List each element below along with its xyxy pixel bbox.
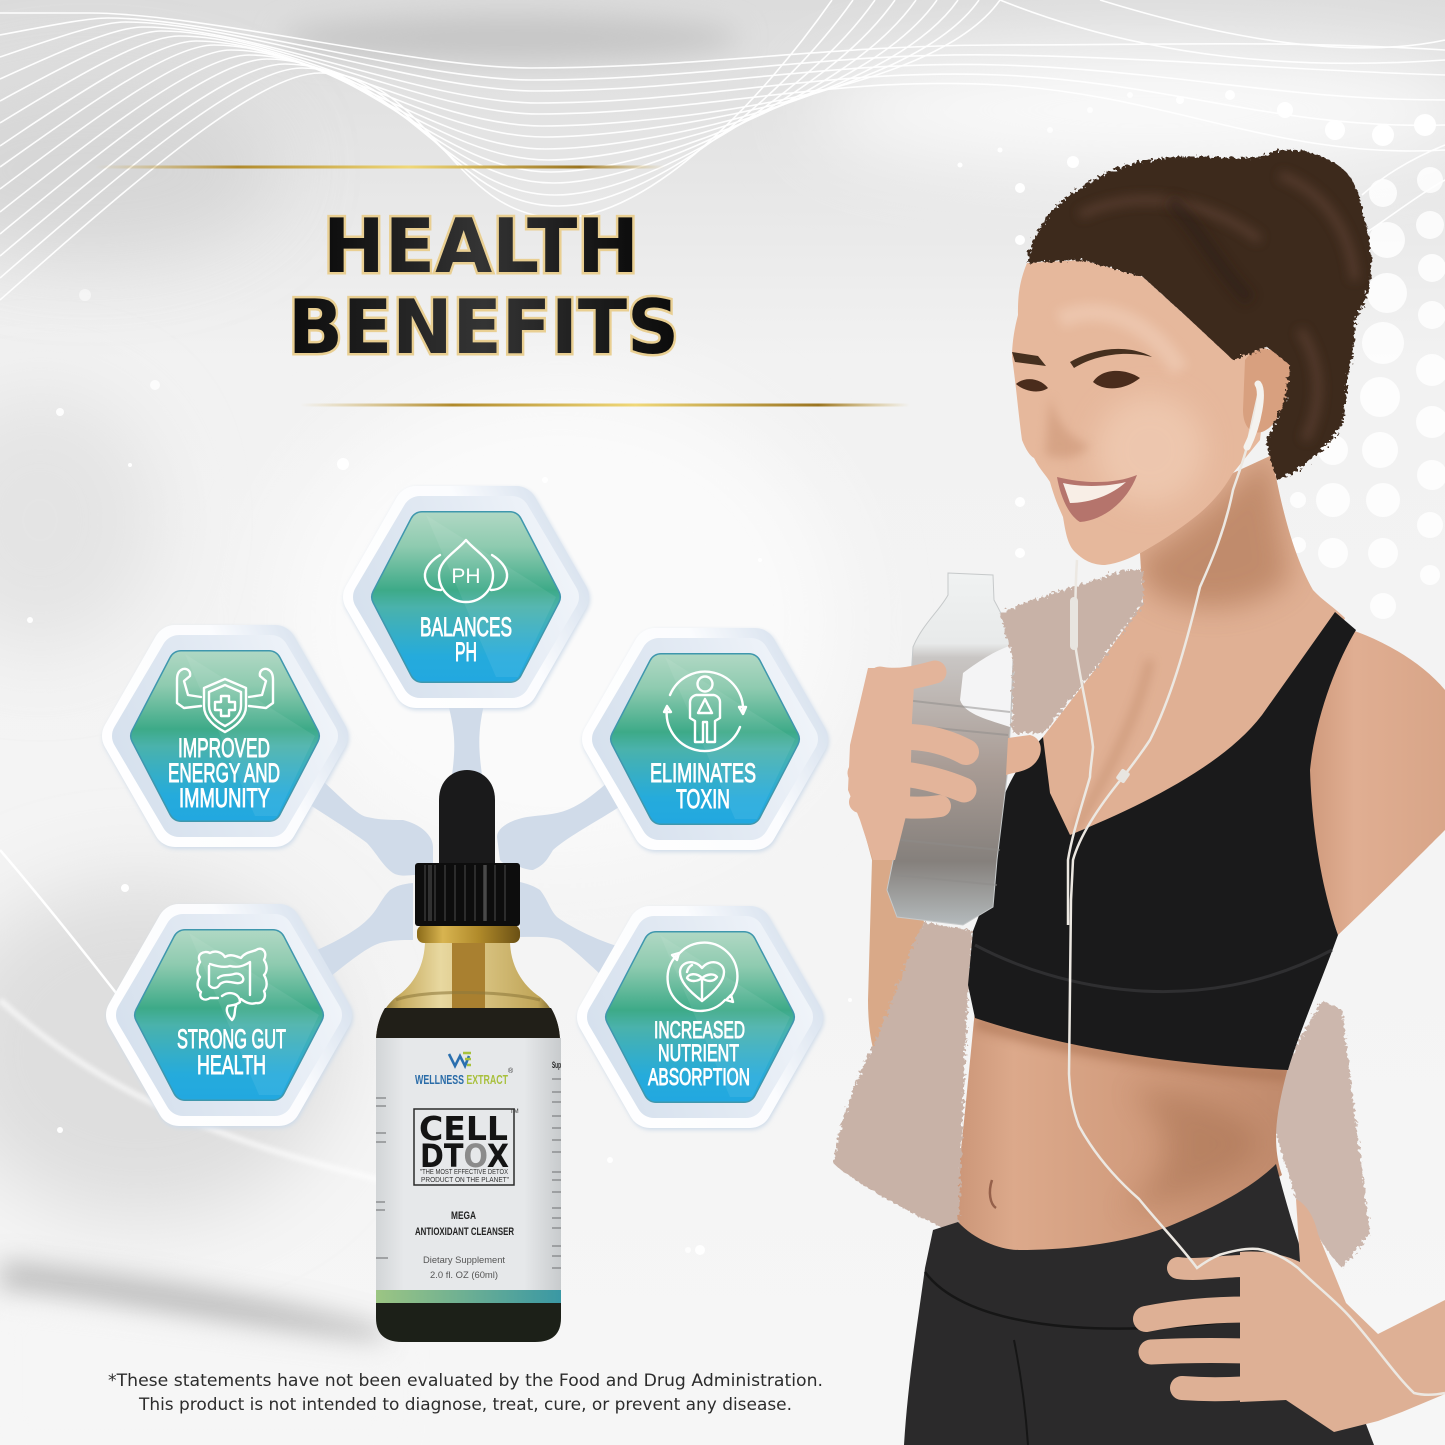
- product logo: "THE MOST EFFECTIVE DETOX: [420, 1169, 508, 1176]
- size text: [423, 1255, 505, 1281]
- dropper bulb: [439, 770, 495, 864]
- ear: [1243, 349, 1290, 433]
- leggings: [904, 1164, 1374, 1445]
- label: ELIMINATES: [650, 758, 756, 788]
- disclaimer: This product is not intended to diagnose, treat, cure, or prevent any disease.: [138, 1395, 792, 1414]
- hexagon: eliminates toxin: [604, 650, 807, 830]
- wave lines: [0, 0, 1445, 300]
- label: [648, 1017, 750, 1091]
- towel left: [834, 922, 973, 1234]
- logo mark: [449, 1053, 471, 1066]
- side panel text: Sup: [552, 1060, 561, 1070]
- gold ring: [417, 925, 520, 943]
- icon: intestines: [197, 949, 267, 1020]
- label: [168, 733, 280, 813]
- label: STRONG GUT: [177, 1024, 286, 1054]
- label: ENERGY AND: [168, 758, 280, 788]
- gold line: top: [95, 166, 665, 168]
- halftone dots: [27, 90, 1445, 1255]
- woman: [834, 150, 1445, 1445]
- hexagon: strong gut health: [128, 926, 331, 1106]
- towel behind right: [1270, 1000, 1370, 1268]
- hand on hip: [1146, 1199, 1445, 1432]
- mouth: [1057, 475, 1137, 522]
- icon: heart with leaf in circle: [668, 943, 737, 1011]
- label: BALANCES: [420, 612, 512, 642]
- icon: shield and arms: [177, 669, 273, 732]
- side panel text: [376, 1060, 561, 1268]
- icon: ph drops: PH: [451, 565, 481, 588]
- size text: Dietary Supplement: [423, 1255, 505, 1266]
- towel around neck: [1000, 570, 1143, 733]
- earphones: [1068, 384, 1445, 1395]
- product logo: [414, 1109, 519, 1185]
- right arm upper: [1280, 625, 1445, 935]
- product bottle: [376, 770, 561, 1342]
- title: [288, 202, 679, 371]
- product logo: DTOX: [420, 1137, 509, 1175]
- label: HEALTH: [197, 1050, 266, 1080]
- product name: MEGA: [451, 1210, 476, 1222]
- eyes: [1016, 371, 1140, 391]
- glass shoulder: [376, 940, 560, 1042]
- eyebrows: [1012, 349, 1152, 368]
- face: [1012, 260, 1290, 565]
- left arm: [863, 827, 924, 1055]
- label: [177, 1024, 286, 1080]
- size text: 2.0 fl. OZ (60ml): [430, 1270, 498, 1281]
- product logo: PRODUCT ON THE PLANET": [421, 1177, 509, 1184]
- hand holding bottle: [848, 668, 1041, 860]
- hair: [1027, 150, 1372, 480]
- bottle base: [376, 1296, 561, 1342]
- label: [376, 1038, 561, 1303]
- hexagon: improved energy and immunity: [124, 647, 327, 827]
- neck and chest: [1043, 456, 1345, 835]
- dropper collar: [415, 863, 520, 926]
- product logo: TM: [510, 1109, 519, 1115]
- label: ABSORPTION: [648, 1064, 750, 1091]
- water bottle: [887, 573, 1015, 925]
- product name: [415, 1210, 514, 1238]
- label: ®: [508, 1067, 514, 1075]
- sports top: [968, 612, 1356, 1070]
- connectors: [295, 700, 630, 985]
- label: IMPROVED: [178, 733, 270, 763]
- label: INCREASED: [654, 1017, 745, 1044]
- label: [650, 758, 756, 814]
- gold line: bottom: [300, 404, 910, 406]
- disclaimer: *These statements have not been evaluated by the Food and Drug Administration.: [108, 1371, 823, 1390]
- disclaimer: [108, 1371, 823, 1414]
- title: HEALTH: [323, 202, 639, 290]
- brand name: WELLNESS EXTRACT: [415, 1072, 508, 1087]
- icon: person with arrows: [664, 672, 746, 751]
- hexagon: increased nutrient absorption: [599, 928, 802, 1108]
- label: PH: [455, 637, 477, 667]
- hexagon: balances ph: [365, 508, 568, 688]
- label: IMMUNITY: [179, 783, 270, 813]
- label: NUTRIENT: [658, 1040, 739, 1067]
- icon: ph drops: [425, 540, 507, 602]
- product logo: CELL: [419, 1109, 508, 1148]
- product name: ANTIOXIDANT CLEANSER: [415, 1226, 514, 1238]
- label: TOXIN: [676, 784, 730, 814]
- title: BENEFITS: [288, 283, 679, 371]
- label: [420, 612, 512, 667]
- midriff: [954, 1016, 1288, 1250]
